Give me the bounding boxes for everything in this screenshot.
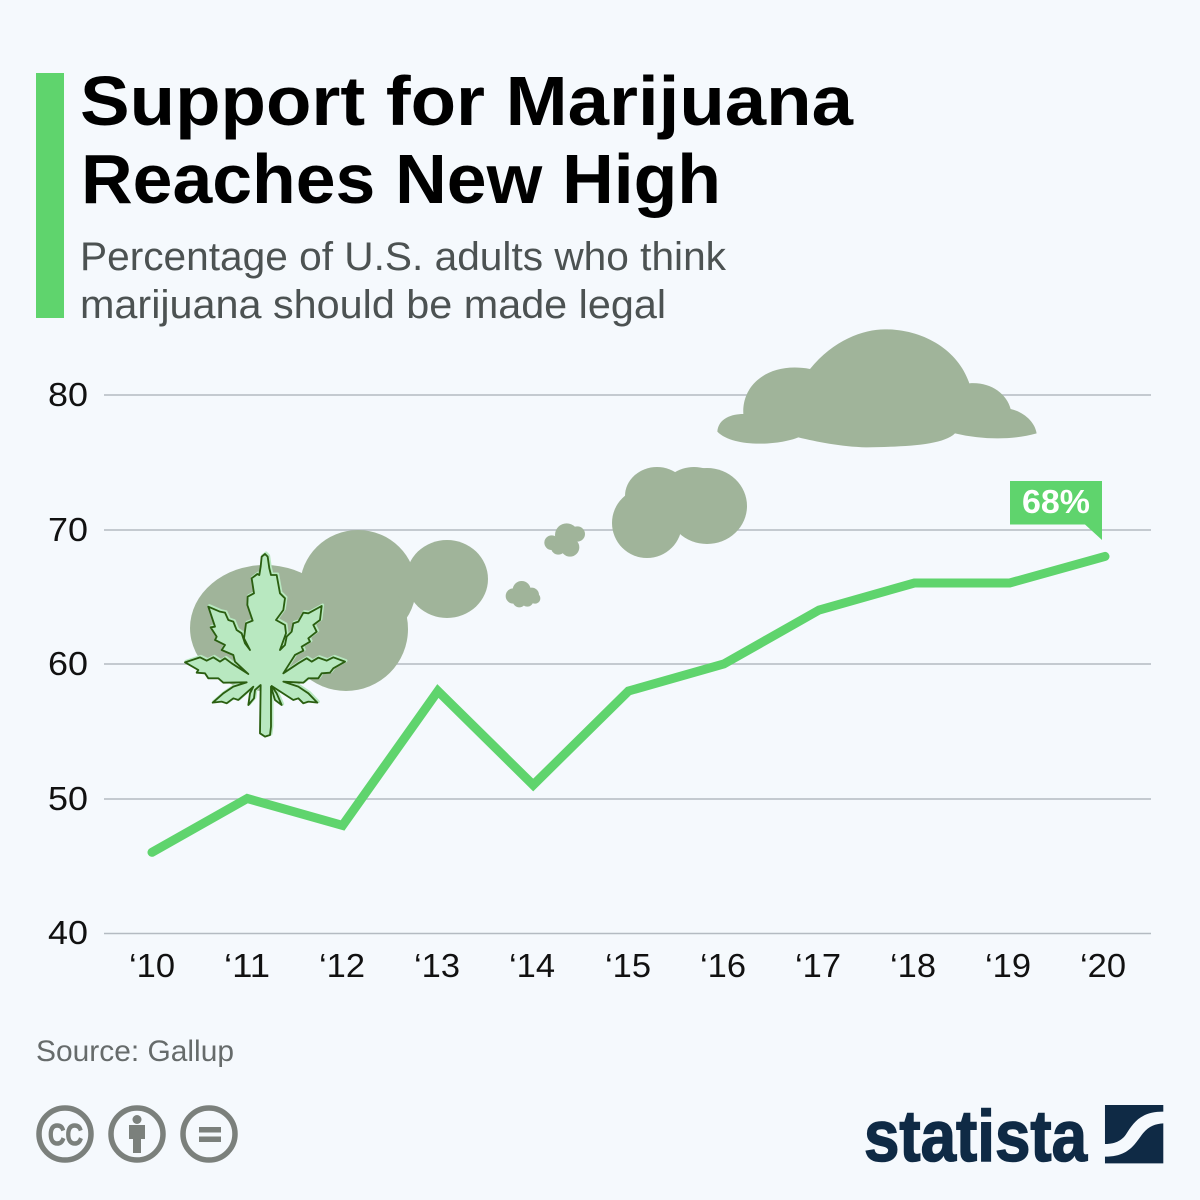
y-axis labels: 80 <box>48 376 88 413</box>
large smoke cloud <box>717 329 1037 447</box>
y-axis labels: 50 <box>48 780 88 817</box>
y-axis labels: 40 <box>48 914 88 951</box>
chart gridlines <box>104 395 1151 934</box>
title <box>80 62 854 218</box>
x-axis labels: ‘12 <box>319 947 365 984</box>
x-axis labels: ‘17 <box>795 947 841 984</box>
x-axis labels: ‘15 <box>605 947 651 984</box>
icon: creative commons <box>39 1108 91 1160</box>
callout: 68%: 68% <box>1022 483 1090 520</box>
x-axis labels: ‘19 <box>985 947 1031 984</box>
icon: creative commons: CC <box>48 1117 83 1152</box>
x-axis labels: ‘20 <box>1080 947 1126 984</box>
callout: 68% <box>1010 481 1102 540</box>
small smoke puff 1 <box>506 581 540 607</box>
subtitle: Percentage of U.S. adults who think <box>80 235 727 279</box>
small smoke puff 2 <box>544 523 585 557</box>
y-axis labels: 70 <box>48 511 88 548</box>
statista logo mark <box>1105 1105 1163 1163</box>
title: Reaches New High <box>81 140 721 218</box>
statista wordmark: statista <box>864 1097 1088 1177</box>
line series: support percentage <box>152 556 1105 852</box>
x-axis labels: ‘18 <box>890 947 936 984</box>
medium smoke cloud <box>612 467 747 558</box>
subtitle: marijuana should be made legal <box>80 283 666 327</box>
subtitle <box>80 235 727 327</box>
smoke clouds near leaf <box>190 530 488 691</box>
icon: attribution <box>111 1108 163 1160</box>
title accent bar <box>36 73 64 318</box>
y-axis labels <box>48 376 88 951</box>
title: Support for Marijuana <box>80 62 854 140</box>
icon: no derivatives <box>183 1108 235 1160</box>
icon: marijuana leaf <box>185 553 346 737</box>
y-axis labels: 60 <box>48 645 88 682</box>
x-axis labels: ‘10 <box>129 947 175 984</box>
x-axis labels: ‘14 <box>509 947 555 984</box>
x-axis labels: ‘11 <box>224 947 270 984</box>
x-axis labels: ‘16 <box>700 947 746 984</box>
source: Source: Gallup <box>36 1035 234 1068</box>
x-axis labels <box>129 947 1126 984</box>
x-axis labels: ‘13 <box>414 947 460 984</box>
